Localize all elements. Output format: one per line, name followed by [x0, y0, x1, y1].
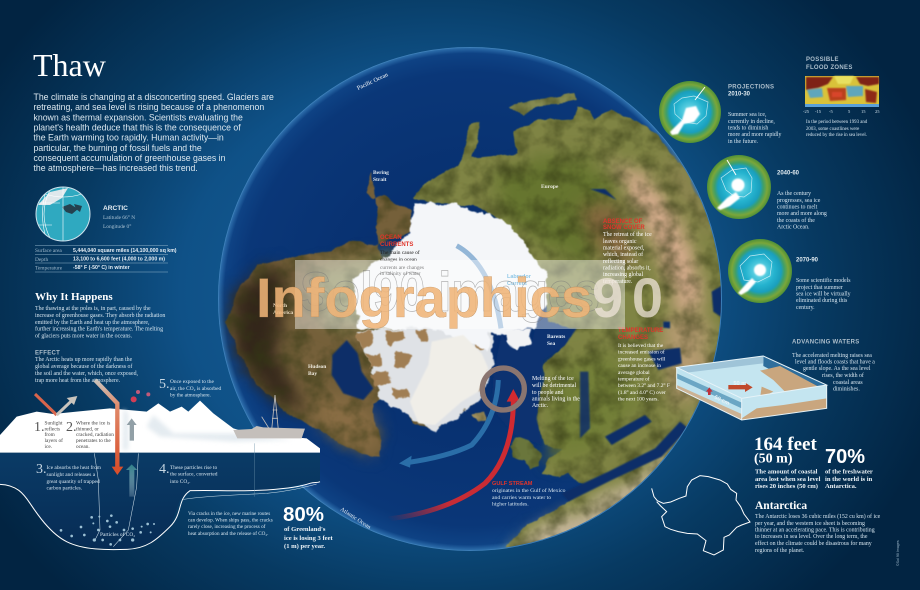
table: Arctic statistics: 5,444,040 square miles (14,100,000 sq km) — [73, 248, 177, 254]
table: Arctic statistics: 13,100 to 6,600 feet (4,000 to 2,000 m) — [73, 256, 165, 262]
label: Bering Strait: Strait — [373, 177, 387, 183]
arrowhead: Gulf Stream — [507, 389, 520, 402]
label: Atlantic Ocean: Atlantic Ocean — [339, 507, 372, 531]
panel: advancing waters — [677, 340, 875, 420]
heading: Why It Happens: Why It Happens — [35, 291, 113, 303]
text: absence of snow cover: temperature. — [603, 279, 633, 285]
panel: possible flood zones: POSSIBLE — [806, 57, 839, 63]
projection 2010-30: currently in decline, — [728, 119, 775, 125]
map: flood zones: -25 — [803, 109, 810, 114]
text: why it happens: further increasing the Earth's temperature. The melting — [35, 326, 163, 332]
label: Labrador: Current — [507, 281, 527, 287]
stat: 164 feet: (50 m) — [754, 452, 793, 466]
text: why it happens: emitted by the Earth and heat up the atmosphere, — [35, 320, 150, 326]
projection 2040-60: As the century — [777, 191, 811, 197]
text: temperature changes: (1.8° and 4.0° C) over — [618, 389, 666, 396]
stat: 70 percent: in the world is in — [825, 476, 873, 483]
land: Europe green — [548, 352, 645, 465]
label: Barents Sea: Barents — [547, 334, 565, 340]
arrow: penetrating sunlight — [95, 380, 117, 468]
water: Barents Sea — [492, 328, 577, 445]
label: Hudson Bay: Bay — [308, 371, 317, 377]
text: cracks in the ice: rarely close, increasing the process of — [188, 523, 266, 530]
projection 2010-30: PROJECTIONS — [728, 84, 774, 90]
step 1: reflects — [44, 426, 60, 432]
step 5: air, the CO₂ is absorbed — [170, 386, 222, 392]
ice shading — [123, 408, 293, 450]
table: Arctic statistics: Temperature — [35, 266, 63, 272]
ice: Arctic sheet — [353, 203, 550, 352]
projection 2070-90: sea ice will be virtually — [796, 292, 851, 298]
credit: ©Sol 90 Images — [896, 540, 900, 566]
text: why it happens: of glaciers puts more water in the oceans. — [35, 332, 133, 340]
stat: 80 percent: ice is losing 3 feet — [284, 535, 334, 542]
step 1 — [34, 420, 63, 450]
text: temperature changes: temperature of — [618, 376, 650, 382]
table: Arctic statistics: Depth — [35, 257, 48, 263]
land: Canadian south — [308, 395, 378, 455]
map: flood zones: -15 — [815, 109, 822, 114]
projection 2010-30: tends to diminish — [728, 126, 768, 132]
particles of CO2 — [60, 514, 155, 546]
step 3: great quantity of trapped — [46, 478, 100, 485]
land: tan Africa rim — [502, 412, 694, 548]
text: cracks in the ice: Via cracks in the ice, new marine routes — [188, 511, 270, 517]
panel: advancing waters: coastal areas — [833, 380, 863, 386]
projection 2040-60: more and more along — [777, 211, 827, 217]
map: flood zones — [803, 76, 880, 114]
panel: advancing waters: ADVANCING WATERS — [792, 340, 860, 346]
land: tan Asia south — [658, 308, 712, 412]
ice: Canadian archipelago — [357, 325, 493, 432]
globe: Arctic seen from above — [218, 47, 735, 565]
step 5: Once exposed to the — [170, 379, 214, 385]
land: pink-tan Asian uplands — [608, 162, 705, 322]
text: Gulf Stream: higher latitudes. — [492, 502, 529, 508]
step 2: cracked, radiation — [76, 432, 114, 438]
label: Europe: Europe — [541, 184, 559, 190]
step 3: Ice absorbs the heat from — [46, 464, 102, 471]
stat: 70 percent: 70% — [825, 446, 865, 468]
step 1: ice. — [44, 444, 52, 450]
text: absence of snow cover: The retreat of the ice — [603, 231, 652, 238]
projection 2040-60: Arctic Ocean. — [777, 224, 810, 230]
text: temperature changes: greenhouse gases will — [618, 356, 666, 362]
label: Hudson Bay: Hudson — [308, 364, 326, 370]
intro text: The climate is changing at a disconcerting speed. Glaciers are — [34, 92, 274, 102]
text: ocean currents: changes in ocean — [380, 257, 417, 263]
step 2: Where the ice is — [76, 420, 110, 426]
land: continents — [227, 93, 735, 565]
watermark: Infographics90: Sol90 images — [300, 260, 600, 323]
stat: 70 percent: of the freshwater — [825, 468, 873, 476]
map: flood zones: -5 — [829, 109, 833, 114]
text: Antarctica: per year, and the western ice sheet is becoming — [755, 521, 865, 527]
step 2: thinned, or — [76, 426, 99, 432]
arrow: cold current — [407, 380, 498, 463]
text: Gulf Stream: originates in the Gulf of Mexico — [492, 487, 566, 494]
step 2: ocean. — [76, 444, 90, 450]
step 3 — [36, 462, 102, 492]
intro text: retreating, and sea level is rising because of a phenomenon — [34, 102, 264, 112]
intro text: particular, the burning of fossil fuels and the — [34, 143, 202, 153]
text: temperature changes: TEMPERATURE — [618, 328, 663, 334]
projection 2040-60: the coasts of the — [777, 217, 815, 224]
text: temperature changes — [618, 328, 670, 403]
projection 2070-90: Some scientific models — [796, 277, 851, 284]
stat: 164 feet: The amount of coastal — [755, 468, 818, 476]
sea under the ice — [0, 453, 320, 549]
text: effect: trap more heat from the atmosphere. — [35, 377, 121, 384]
panel: advancing waters: gentle slope. As the sea level — [803, 366, 871, 372]
text: Antarctica: to increases in sea level. Over the long term, the — [755, 534, 868, 540]
panel: possible flood zones: In the period between 1993 and — [806, 120, 868, 125]
step 1: 1. — [34, 420, 44, 435]
land: brown plateau — [578, 202, 638, 268]
step 3: sunlight and releases a — [46, 472, 96, 478]
water: inland seas — [332, 189, 728, 502]
text: Gulf Stream: and carries warm water to — [492, 495, 551, 501]
projection 2040-60: progresses, sea ice — [777, 198, 821, 204]
text: why it happens: The thawing at the poles is, in part, caused by the — [35, 306, 151, 312]
step 1: layers of — [44, 437, 63, 444]
projection 2070-90: eliminated during this — [796, 298, 848, 304]
step 4 — [159, 462, 218, 485]
land: dark west of North America — [232, 265, 308, 412]
label: North America: North — [273, 303, 287, 309]
text: temperature changes: It is believed that the — [618, 343, 664, 349]
panel: possible flood zones: reduced by the rise in sea level. — [806, 133, 867, 138]
stat: 80 percent: (1 m) per year. — [284, 543, 325, 550]
panel: possible flood zones: FLOOD ZONES — [806, 65, 853, 71]
diagram: sea-level box — [677, 356, 827, 420]
step 4: into CO₂. — [170, 479, 190, 485]
arrow: width lost — [728, 383, 753, 392]
diagram: sea-level box: 50 cm — [713, 395, 730, 407]
projection 2010-30: 2010-30 — [728, 92, 751, 98]
arrow: reflected sunlight — [35, 394, 57, 415]
text: Gulf Stream: GULF STREAM — [492, 481, 533, 487]
text: temperature changes: the next 100 years. — [618, 397, 659, 403]
text: absence of snow cover: leaves organic — [603, 239, 637, 245]
text: Arctic coordinates: Longitude 0° — [103, 223, 131, 230]
label: Barents Sea: Sea — [547, 341, 556, 347]
icon: drilling ship — [233, 395, 305, 438]
text: absence of snow cover: material exposed, — [603, 246, 645, 252]
projection 2010-30: Summer sea ice, — [728, 112, 767, 118]
table: Arctic statistics: Surface area — [35, 247, 62, 254]
CO2 gas bubbles — [131, 390, 150, 402]
heading: Effect: EFFECT — [35, 350, 60, 356]
panel: projections — [659, 81, 851, 311]
label: Labrador: Labrador — [507, 274, 532, 280]
text: temperature changes: average global — [618, 370, 650, 376]
text: ocean currents — [380, 235, 424, 277]
text: effect: global average because of the darkness of — [35, 363, 132, 370]
panel: possible flood zones — [803, 57, 880, 138]
text: Gulf Stream — [492, 481, 566, 508]
text: cracks in the ice: heat absorption and the release of CO₂. — [188, 530, 268, 537]
text: melting effects: Melting of the ice — [532, 375, 574, 382]
panel: advancing waters: diminishes. — [833, 386, 860, 392]
projection 2010-30: more and more rapidly — [728, 132, 781, 138]
stat: 70 percent: Antarctica. — [825, 483, 857, 490]
panel: advancing waters: level and floods coasts that have a — [795, 358, 875, 366]
text: ocean currents: CURRENTS — [380, 242, 413, 248]
intro text: consequent accumulation of greenhouse gases in — [34, 153, 226, 163]
stat: 80 percent: of Greenland's — [284, 526, 326, 533]
text: Antarctica: regions of the planet. — [755, 547, 805, 554]
text: temperature changes: cause an increase in — [618, 363, 661, 369]
text: melting effects: will be detrimental — [532, 383, 577, 389]
step 1: from — [44, 431, 56, 438]
crack outlines — [94, 453, 138, 547]
text: temperature changes: CHANGES — [618, 335, 648, 341]
text: temperature changes: increased emission of — [618, 349, 665, 356]
text: Arctic coordinates: ARCTIC — [103, 205, 128, 212]
stat: 164 feet: 164 feet — [754, 434, 817, 455]
watermark: Infographics90: Infographics — [256, 266, 592, 329]
label: Bering Strait: Bering — [373, 170, 389, 176]
text: ocean currents: in salinity of water — [380, 270, 421, 277]
text: why it happens: increase of greenhouse gases. They absorb the radiation — [35, 312, 165, 319]
text: absence of snow cover: SNOW COVER — [603, 225, 645, 231]
title: Thaw — [33, 47, 106, 83]
stat: 164 feet: rises 20 inches (50 cm) — [755, 483, 818, 490]
intro text: the atmosphere—has increased this trend. — [34, 163, 198, 173]
map: flood zones: 5 — [848, 109, 851, 114]
stat: 164 feet — [754, 434, 821, 490]
panel: advancing waters: The accelerated melting raises sea — [792, 353, 872, 359]
text: ocean currents: currents are changes — [380, 265, 424, 271]
projection 2010-30: in the future. — [728, 138, 759, 145]
text: melting effects: animals living in the — [532, 396, 580, 402]
step 3: 3. — [36, 462, 46, 477]
projection 2010-30 — [659, 81, 781, 145]
step 2: 2. — [66, 420, 76, 435]
text: effect: the soil and the water, which, once exposed, — [35, 371, 139, 377]
land: forest of Siberia — [492, 155, 615, 262]
text: absence of snow cover: which, instead of — [603, 251, 643, 258]
step 1: Sunlight — [44, 420, 63, 426]
step 5 — [159, 377, 222, 398]
text: ocean currents: The main cause of — [380, 249, 420, 256]
arrowhead: cold current — [399, 456, 412, 468]
stat: 80 percent — [283, 503, 334, 550]
text: Arctic coordinates — [103, 205, 135, 230]
text: absence of snow cover — [603, 219, 652, 285]
step 4: 4. — [159, 462, 170, 477]
ice: Svalbard — [505, 330, 532, 350]
land: green lowlands of Canada — [315, 252, 402, 328]
intro text: planet's health deduce that this is the consequence of — [34, 122, 241, 132]
text: absence of snow cover: ABSENCE OF — [603, 219, 643, 225]
text: Antarctica: effect on the climate could be disastrous for many — [755, 540, 872, 547]
arrow: rising particles — [126, 464, 137, 497]
step 4: These particles rise to — [170, 465, 217, 471]
projection 2070-90: 2070-90 — [796, 258, 819, 264]
label: Pacific Ocean: Pacific Ocean — [356, 71, 389, 92]
land: far eastern rim — [667, 144, 703, 210]
intro text: known as thermal expansion. Scientists evaluating the — [34, 112, 243, 122]
label: North America: America — [273, 310, 293, 316]
icon: mini Arctic globe — [36, 187, 90, 241]
text: melting effects: to people and — [532, 390, 564, 396]
step 2 — [66, 420, 114, 450]
intro text: the Earth warming too rapidly. Human activity—in — [34, 133, 224, 143]
step 4: the surface, converted — [170, 470, 218, 478]
step 2: penetrates to the — [76, 438, 111, 444]
text: Antarctica: The Antarctic loses 36 cubic miles (152 cu km) of ice — [755, 513, 881, 520]
step 3: carbon particles. — [46, 486, 82, 492]
projection 2070-90: project that summer — [796, 285, 843, 291]
diagram: sea-level box: 50 m — [733, 381, 746, 387]
seabed line — [0, 482, 320, 550]
text: absence of snow cover: increasing global — [603, 272, 643, 278]
panel: advancing waters: rises, the width of — [822, 372, 864, 379]
land: brown patches in the archipelago — [357, 330, 487, 398]
heading: Antarctica: Antarctica — [755, 500, 807, 512]
text: melting effects: Arctic. — [532, 403, 549, 409]
label: particles of CO2: Particles of CO₂ — [100, 531, 135, 538]
stat: 80 percent: 80% — [283, 503, 324, 526]
projection 2040-60: continues to melt — [777, 204, 818, 210]
ice shelf — [0, 401, 320, 453]
text: absence of snow cover: reflecting solar — [603, 258, 638, 265]
ice: Greenland — [410, 335, 488, 425]
text: Arctic coordinates: Latitude 66° N — [103, 214, 135, 221]
step 5: 5. — [159, 377, 170, 392]
text: absence of snow cover: radiation, absorbs it, — [603, 266, 651, 272]
stat: 164 feet: area lost when sea level — [755, 476, 821, 483]
projection 2070-90: century. — [796, 305, 815, 311]
text: temperature changes: between 3.2° and 7.2° F — [618, 382, 670, 389]
text: effect: The Arctic heats up more rapidly than the — [35, 357, 133, 363]
projection 2040-60 — [707, 155, 827, 230]
map: flood zones: 15 — [861, 109, 866, 114]
watermark: Infographics90: 90 — [592, 266, 663, 329]
panel: possible flood zones: 2003, some coastlines were — [806, 127, 859, 132]
step 5: by the atmosphere. — [170, 392, 211, 398]
map: flood zones: 25 — [875, 109, 880, 114]
arrow: rise in level — [706, 387, 713, 395]
table: Arctic statistics: -58° F (-50° C) in winter — [73, 265, 130, 271]
projection 2070-90 — [728, 239, 851, 311]
text: cracks in the ice: can develop. When ships pass, the cracks — [188, 518, 273, 524]
text: Antarctica: thinner at an accelerating pace. This is contributing — [755, 528, 875, 534]
arrow: Gulf Stream — [388, 400, 513, 519]
table: Arctic statistics — [35, 246, 177, 272]
text: ocean currents: OCEAN — [380, 235, 402, 241]
diagram: ice cross-section — [0, 377, 320, 550]
projection 2040-60: 2040-60 — [777, 170, 800, 176]
ring: melting highlight — [482, 368, 524, 410]
map: Antarctica outline — [652, 476, 750, 555]
stat: 70 percent — [825, 446, 873, 490]
arrow: cold current on the ice — [457, 246, 501, 328]
continental shelf line — [183, 484, 317, 499]
